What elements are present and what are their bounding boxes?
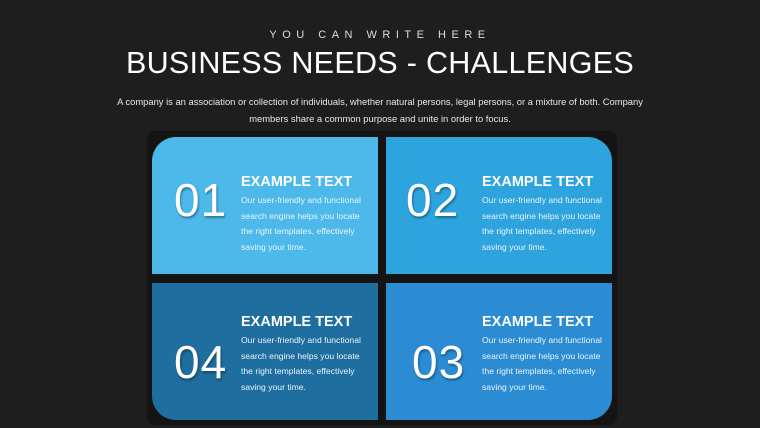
title: BUSINESS NEEDS - CHALLENGES [126,46,634,80]
number 02: 02 [406,174,459,226]
subtitle: YOU CAN WRITE HERE [269,29,491,41]
number 01: 01 [174,174,227,226]
heading 01: EXAMPLE TEXT [241,174,352,190]
frame [147,131,617,425]
text 04: Our user-friendly and functional search engine helps you locate the right templates, effectively saving your time. [241,335,361,392]
heading 04: EXAMPLE TEXT [241,314,352,330]
panel: 03 [386,283,612,420]
panel: 02 [386,137,612,274]
heading 03: EXAMPLE TEXT [482,314,593,330]
text 03: Our user-friendly and functional search engine helps you locate the right templates, effectively saving your time. [482,335,602,392]
number 04: 04 [174,336,227,388]
text 02: Our user-friendly and functional search engine helps you locate the right templates, effectively saving your time. [482,195,602,252]
panel: 01 [152,137,378,274]
heading 02: EXAMPLE TEXT [482,174,593,190]
panel: 04 [152,283,378,420]
number 03: 03 [412,336,465,388]
text 01: Our user-friendly and functional search engine helps you locate the right templates, effectively saving your time. [241,195,361,252]
description: A company is an association or collection of individuals, whether natural persons, legal persons, or a mixture of both. Company members share a common purpose and unite in order to focus. [117,96,643,124]
